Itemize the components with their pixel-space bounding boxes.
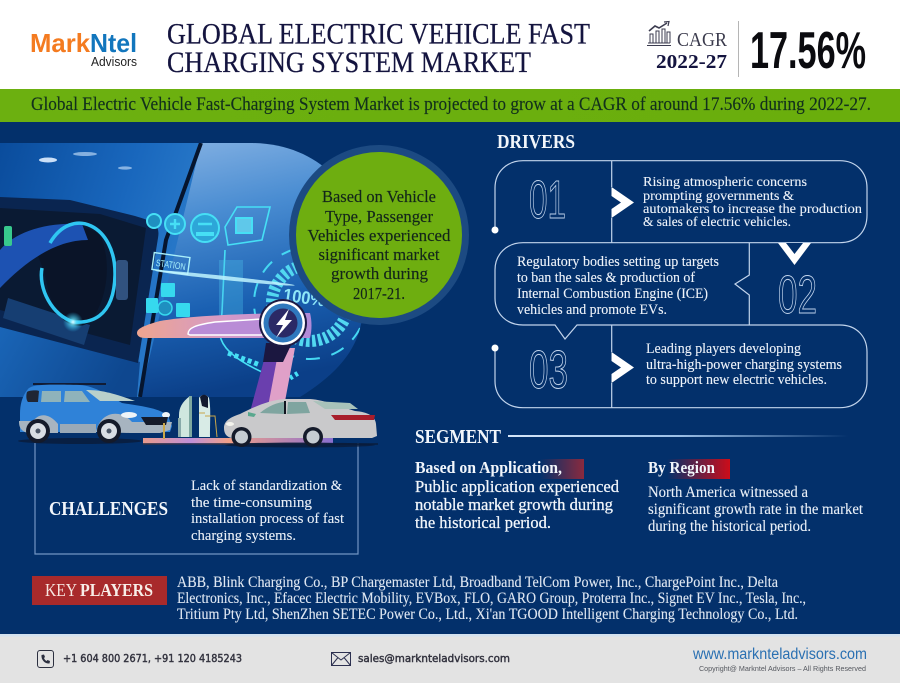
light streak <box>155 270 295 286</box>
key players list <box>177 574 806 623</box>
icon: blue SUV <box>18 384 172 444</box>
icon: charging station <box>178 395 217 437</box>
segment: application: Based on Application, <box>415 458 562 477</box>
segment: region: By Region <box>648 458 715 477</box>
key players badge: PLAYERS <box>80 580 153 600</box>
lightning badge <box>259 299 307 347</box>
challenges panel: Lack of standardization & <box>191 478 342 494</box>
segment: region: significant growth rate in the market <box>648 501 864 518</box>
logo: MarkNtel Advisors: Advisors <box>91 55 137 69</box>
HUD icons <box>147 207 300 378</box>
challenges panel: installation process of fast <box>191 511 345 527</box>
title: CHARGING SYSTEM MARKET <box>167 47 531 79</box>
HUD direction pad <box>146 283 190 317</box>
title <box>167 18 590 79</box>
website: www.marknteladvisors.com <box>692 646 867 663</box>
segment: region <box>648 458 864 535</box>
title: GLOBAL ELECTRIC VEHICLE FAST <box>167 18 590 50</box>
callout: vehicle type: growth during <box>331 264 428 283</box>
key players list: Electronics, Inc., Efacec Electric Mobility, EVBox, FLO, GARO Group, Proterra Inc., Signet EV Inc., Tesla, Inc., <box>177 590 806 607</box>
driver 2: vehicles and promote EVs. <box>517 302 667 318</box>
charging platform <box>143 438 378 445</box>
door seam <box>140 143 201 397</box>
driver 1: 01 <box>529 170 566 230</box>
challenges panel: the time-consuming <box>191 495 313 511</box>
segment: application <box>415 458 620 532</box>
driver 2: Regulatory bodies setting up targets <box>517 254 719 270</box>
driver 3: Leading players developing <box>646 341 801 357</box>
segment: region: North America witnessed a <box>648 484 808 501</box>
segment: application: Public application experienced <box>415 477 620 496</box>
icon: silver sedan <box>224 399 377 448</box>
driver 2: to ban the sales & production of <box>517 270 695 286</box>
challenges panel: CHALLENGES <box>49 498 168 520</box>
driver 1: automakers to increase the production <box>643 202 862 217</box>
key players list: Tritium Pty Ltd, ShenZhen SETEC Power Co., Ltd., Xi'an TGOOD Intelligent Charging Technology Co., Ltd. <box>177 606 798 623</box>
challenges panel: charging systems. <box>191 528 296 544</box>
callout: vehicle type: Based on Vehicle <box>322 187 436 206</box>
copyright: Copyright@ Markntel Advisors – All Rights Reserved <box>699 664 866 673</box>
CAGR label: CAGR <box>677 29 728 51</box>
glowing ring <box>41 223 115 322</box>
segment: application: the historical period. <box>415 513 551 532</box>
key players badge: KEY <box>45 580 77 600</box>
panel: drivers flow <box>492 161 867 408</box>
canopy <box>137 313 312 338</box>
driver 3: ultra-high-power charging systems <box>646 357 842 373</box>
HUD station text: STATION <box>155 258 186 273</box>
driver 3: 03 <box>529 340 568 400</box>
green summary banner <box>0 89 900 122</box>
HUD gauge: 100% <box>282 285 326 310</box>
driver 2: 02 <box>778 265 817 325</box>
driver 1: Rising atmospheric concerns <box>643 175 807 190</box>
plug and cable <box>38 228 107 326</box>
post <box>250 360 280 412</box>
drivers heading: DRIVERS <box>497 131 575 153</box>
car body left of door seam <box>0 143 201 397</box>
callout: vehicle type: Type, Passenger <box>325 207 434 226</box>
email: sales@marknteladvisors.com <box>358 652 510 665</box>
logo: MarkNtel Advisors: Mark <box>30 28 91 58</box>
header band <box>0 0 900 89</box>
icon: phone <box>38 650 54 668</box>
callout: vehicle type: Vehicles experienced <box>308 226 451 245</box>
icon: growth chart <box>647 22 671 46</box>
key players list: ABB, Blink Charging Co., BP Chargemaster Ltd, Broadband TelCom Power, Inc., ChargePoint Inc., Delta <box>177 574 778 591</box>
callout: vehicle type: significant market <box>318 245 440 264</box>
charging socket recess <box>0 197 158 363</box>
driver 1: & sales of electric vehicles. <box>643 215 791 230</box>
segment: region: during the historical period. <box>648 518 811 535</box>
driver 3: to support new electric vehicles. <box>646 372 827 388</box>
key players badge <box>32 576 167 605</box>
driver 2 <box>495 243 840 339</box>
driver 3 <box>492 325 867 408</box>
reflections <box>39 158 57 162</box>
CAGR label: 2022-27 <box>656 51 727 73</box>
logo: MarkNtel Advisors: Ntel <box>90 28 137 58</box>
challenges panel <box>35 443 358 554</box>
driver 1: prompting governments & <box>643 189 794 204</box>
footer <box>0 634 900 683</box>
callout: vehicle type: 2017-21. <box>353 284 405 303</box>
charging canopy illustration <box>137 299 312 412</box>
logo: MarkNtel Advisors <box>30 28 137 69</box>
driver 1 <box>492 161 867 243</box>
HUD gauge <box>254 247 366 359</box>
segment heading: SEGMENT <box>415 426 502 448</box>
segment: application: notable market growth during <box>415 495 613 514</box>
icon: mail <box>332 652 350 666</box>
callout: vehicle type <box>289 145 469 325</box>
phone numbers: +1 604 800 2671, +91 120 4185243 <box>63 652 242 665</box>
driver 2: Internal Combustion Engine (ICE) <box>517 286 708 302</box>
CAGR label <box>656 29 728 73</box>
hero image: EV charging port <box>0 143 370 397</box>
